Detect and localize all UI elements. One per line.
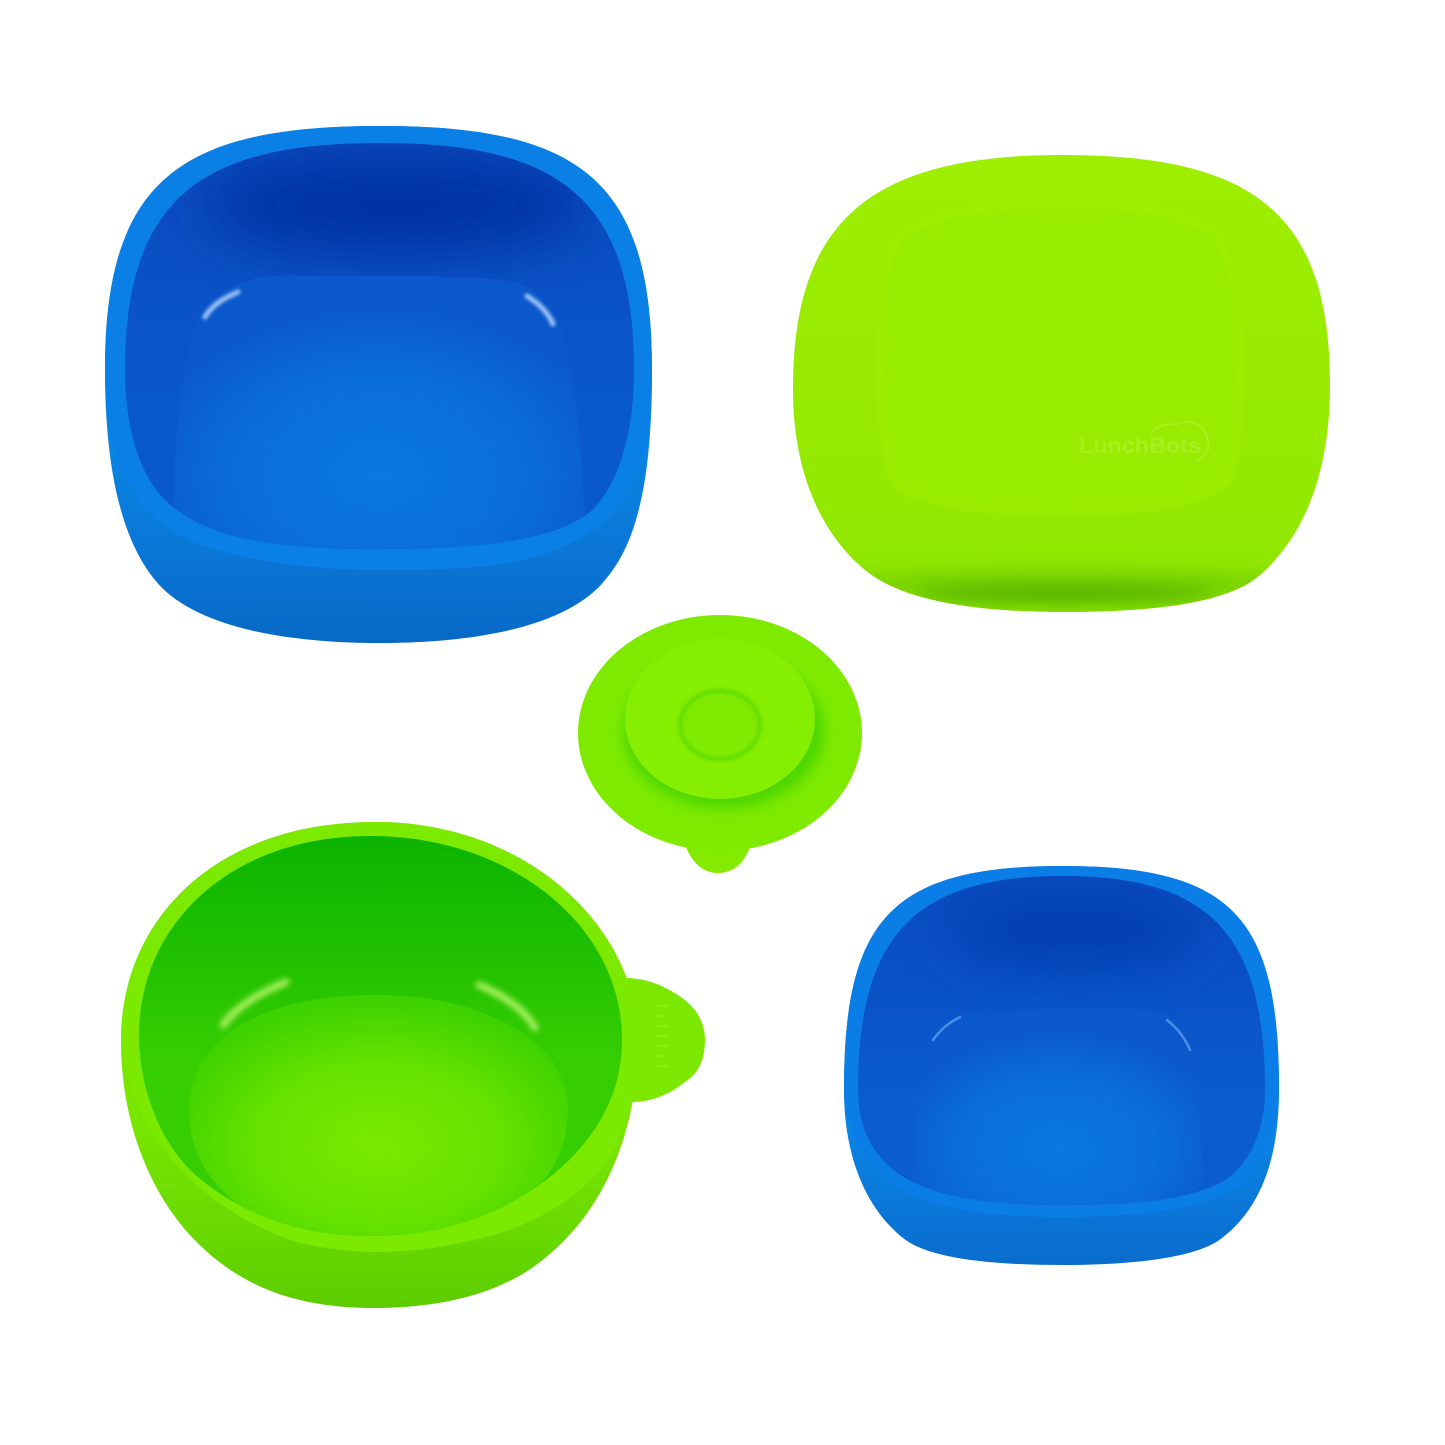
well dark shadow [945,898,1205,962]
well wall [850,870,1270,1210]
blue bowl inner well [125,143,634,549]
small bowl rim [844,866,1279,1217]
deep shade [915,586,1215,602]
well dark shadow [205,157,585,253]
blue bowl floor [174,275,586,560]
bowl tab [625,978,705,1102]
lid lower shading [830,571,1300,602]
lid outer silhouette [793,155,1330,612]
small bowl inner well [850,870,1270,1210]
small bowl body [844,866,1279,1265]
bowl inner well [125,825,635,1245]
small bowl highlights [933,1017,1190,1050]
blue bowl rim [105,126,652,570]
blue bowl body [105,126,652,643]
well wall [125,825,635,1245]
bowl highlights [223,982,535,1028]
large blue bowl [105,126,652,643]
well wall [125,143,634,549]
lid logo swoosh [1151,422,1209,462]
blue bowl highlights [205,292,553,324]
suction lid tab [684,842,752,873]
lid logo: LunchBots [1079,433,1201,458]
tab ridges [656,1006,668,1066]
suction lid shadow [624,656,824,808]
lid raised inner square [880,207,1240,514]
green round bowl [121,822,705,1308]
product illustration [105,126,1330,1308]
suction lid [578,615,862,873]
suction cup [625,639,815,799]
small blue bowl [844,866,1279,1265]
bowl rim [121,822,638,1252]
bowl body [121,822,638,1308]
green lid [793,155,1330,612]
small bowl floor [928,1046,1191,1205]
suction cup centre ring [680,691,760,759]
wide shade [830,571,1300,599]
suction lid base disc [578,615,862,851]
bowl floor [189,995,568,1245]
